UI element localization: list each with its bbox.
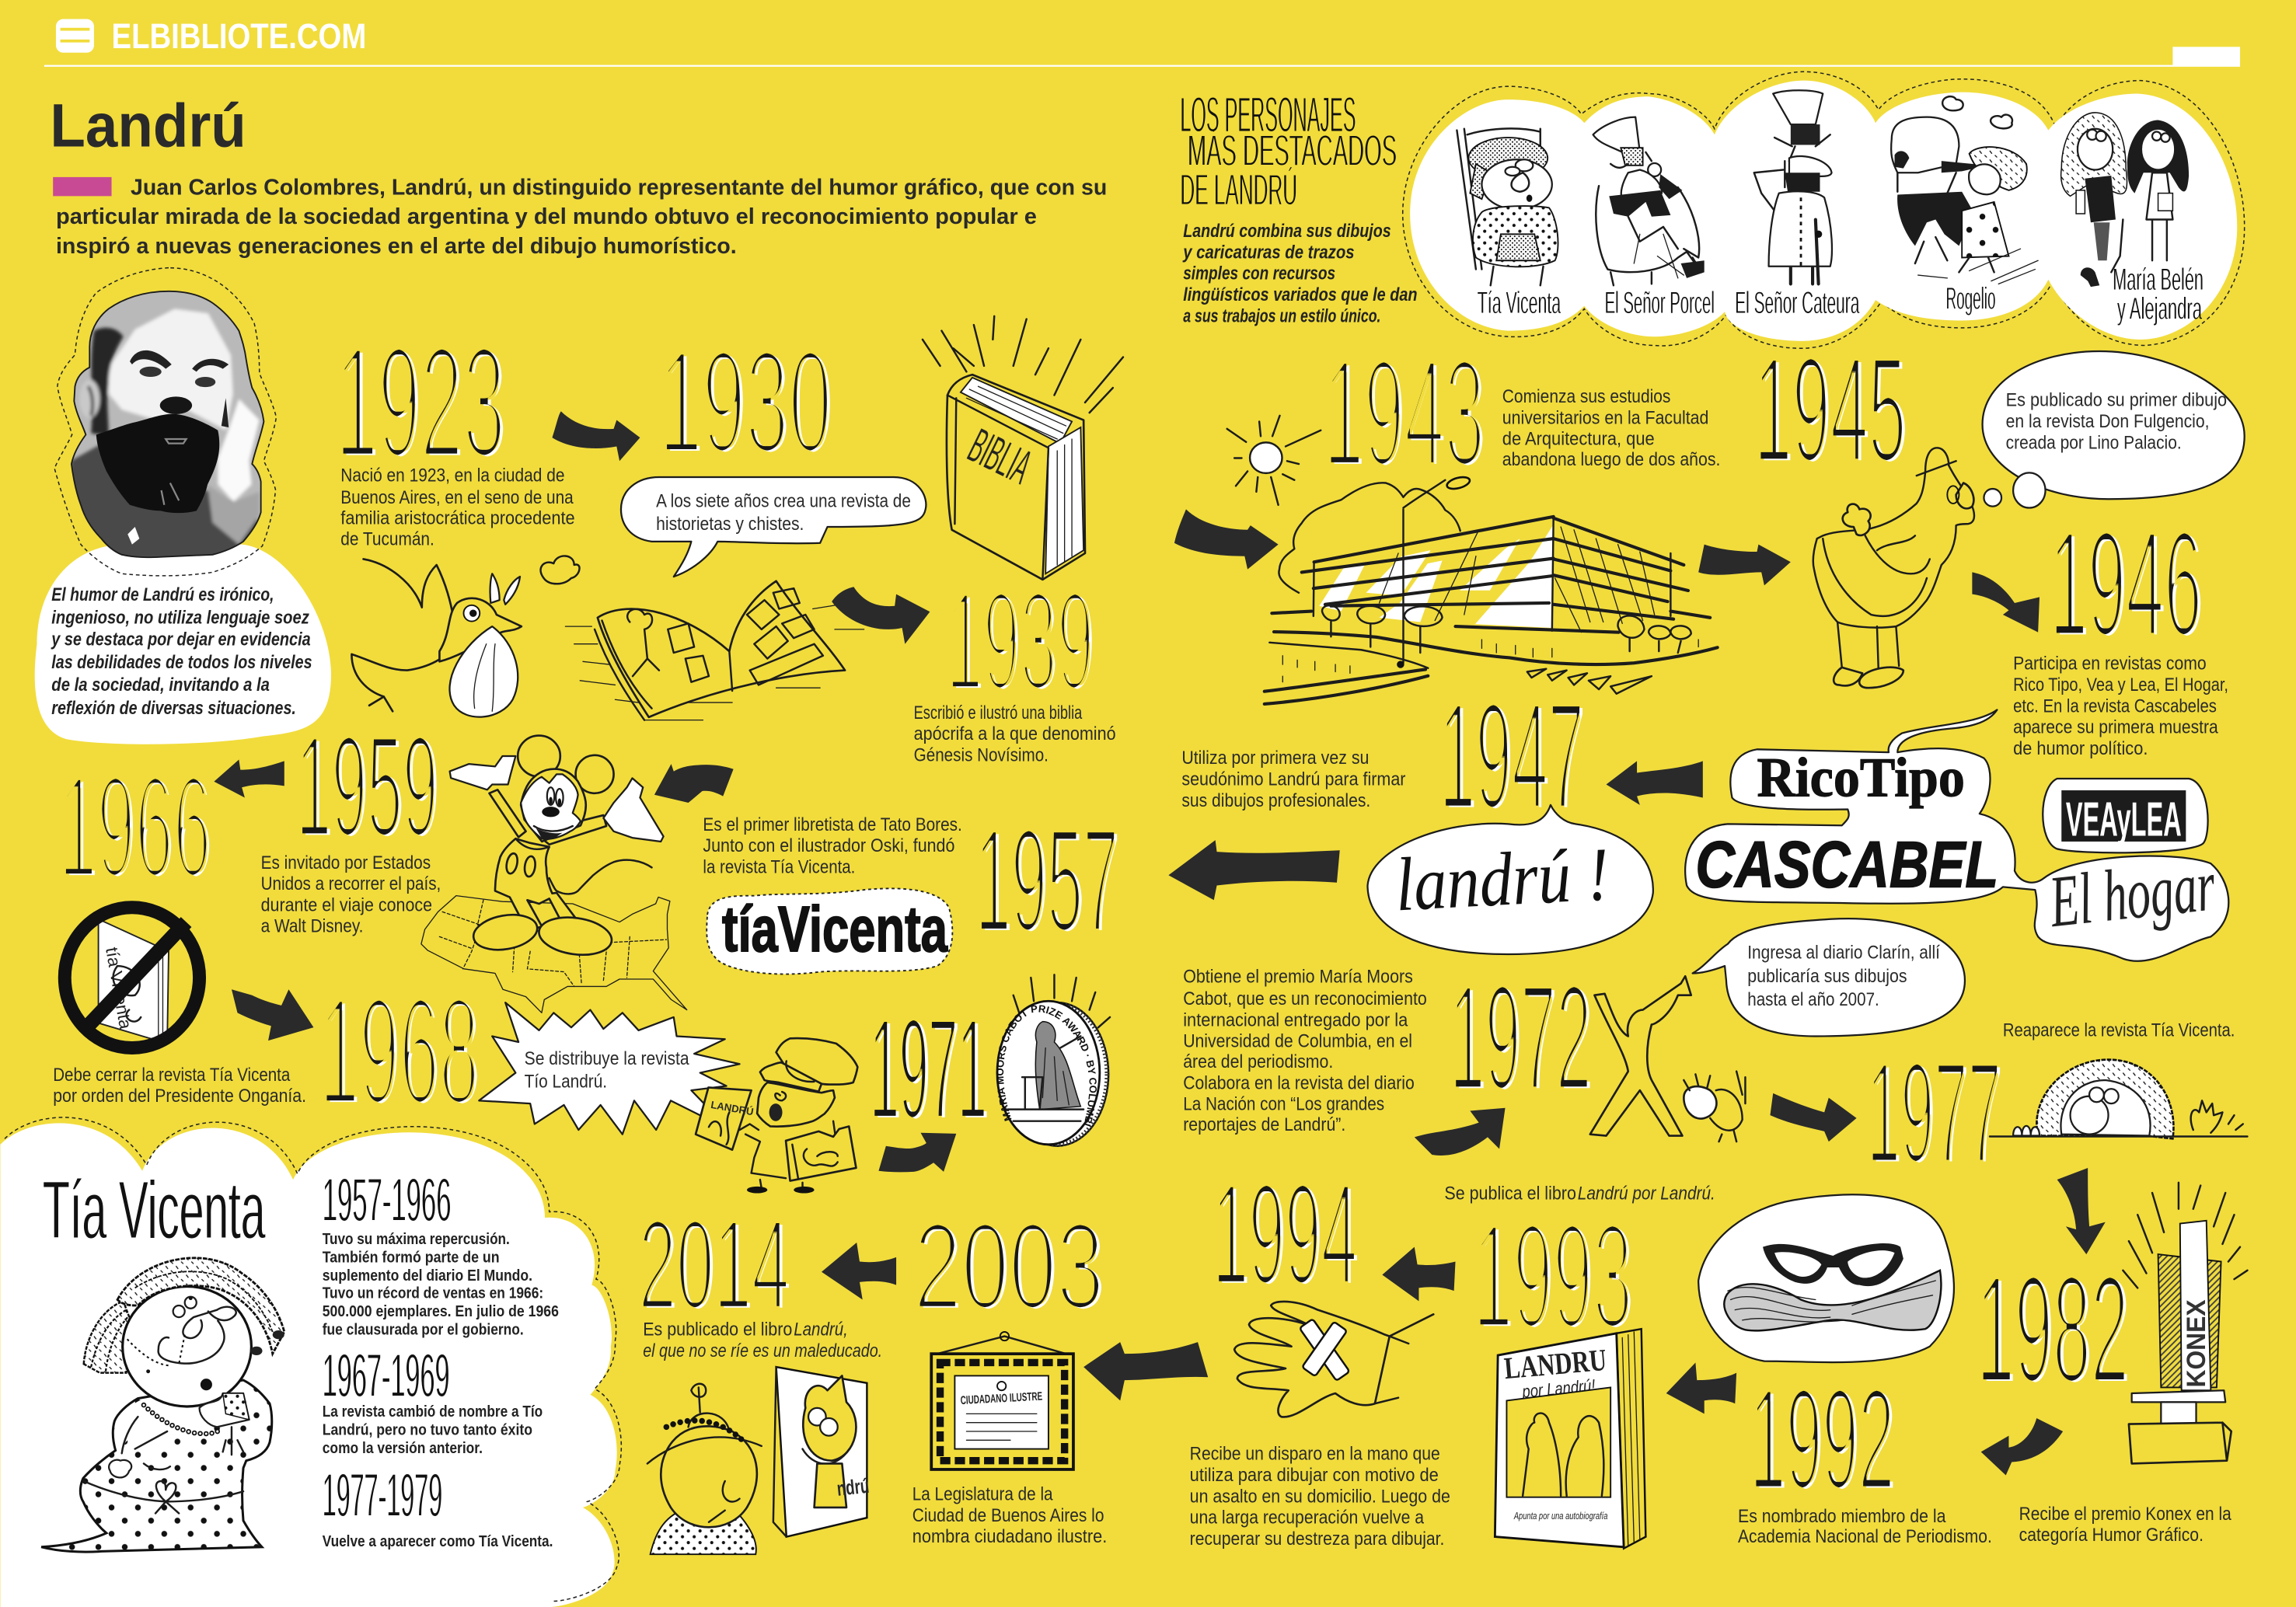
arrow: 1993 to 1994 bbox=[1382, 1247, 1456, 1301]
text: period 1967-1969: como la versión anterior. bbox=[323, 1439, 483, 1457]
icon: glasses on newspapers bbox=[1698, 1194, 1954, 1362]
text: book 2014: Es publicado el libro bbox=[643, 1319, 792, 1340]
text: characters description: lingüísticos variados que le dan bbox=[1183, 284, 1418, 305]
text: closure of magazine bbox=[53, 1065, 306, 1107]
text: Walt Disney 1959: a Walt Disney. bbox=[261, 916, 363, 937]
infographic canvas: 1972 bbox=[1450, 953, 1592, 1121]
text: period 1967-1969: Landrú, pero no tuvo tanto éxito bbox=[323, 1421, 532, 1439]
character names: Tía Vicenta bbox=[1478, 286, 1561, 320]
thought bubble: first drawing: Es publicado su primer dibujo bbox=[2006, 390, 2227, 411]
year 1930: 1930 bbox=[659, 320, 832, 483]
thought bubble: first drawing bbox=[1983, 351, 2245, 508]
heading: characters bbox=[1180, 87, 1397, 214]
text: hand injury 1994: una larga recuperación vuelve a bbox=[1190, 1508, 1424, 1529]
icon: book Landrú por Landrú bbox=[1495, 1329, 1645, 1549]
speech bubble: Landrú signature: landrú ! bbox=[1394, 832, 1611, 927]
logo: Vea y Lea: VEAyLEA bbox=[2066, 793, 2182, 846]
text: Tato Bores 1957 bbox=[703, 814, 962, 877]
arrow: 1992 to 1993 bbox=[1666, 1362, 1736, 1414]
infographic canvas: LOS PERSONAJES bbox=[1180, 87, 1356, 143]
text: academy 1992 bbox=[1738, 1506, 1992, 1547]
text: Konex award: categoría Humor Gráfico. bbox=[2019, 1525, 2204, 1546]
text: period 1957-1966: suplemento del diario El Mundo. bbox=[323, 1267, 532, 1285]
logo: Tía Vicenta magazine bbox=[707, 888, 952, 974]
thought bubble: first drawing: creada por Lino Palacio. bbox=[2006, 432, 2182, 453]
header bar bbox=[44, 16, 2240, 67]
text: book 2014: el que no se ríe es un maleducado. bbox=[643, 1340, 882, 1361]
text: magazines 1946: Rico Tipo, Vea y Lea, El Hogar, bbox=[2013, 675, 2228, 695]
text: Walt Disney 1959 bbox=[261, 852, 441, 937]
panel: humor quote bubble: y se destaca por dejar en evidencia bbox=[51, 629, 311, 650]
text: hand injury 1994: Recibe un disparo en la mano que bbox=[1190, 1444, 1440, 1465]
text: Cabot prize 1972: Obtiene el premio María Moors bbox=[1183, 967, 1413, 988]
text: closure of magazine: Debe cerrar la revista Tía Vicenta bbox=[53, 1065, 291, 1086]
text: Konex award: Recibe el premio Konex en la bbox=[2019, 1504, 2231, 1525]
icon: figure with trumpet bbox=[1590, 976, 1745, 1142]
logo: Cascabel: CASCABEL bbox=[1695, 827, 1998, 901]
icon: Tía Vicenta full figure bbox=[41, 1258, 284, 1552]
text: university 1943: Comienza sus estudios bbox=[1502, 386, 1670, 407]
infographic canvas: 1968 bbox=[319, 966, 479, 1136]
character names: El Señor Porcel bbox=[1605, 286, 1715, 320]
panel: Tía Vicenta sidebar: 1967-1969 bbox=[323, 1340, 450, 1410]
arrow: to 1945 bbox=[1698, 545, 1791, 585]
text: birth 1923: familia aristocrática procedente bbox=[340, 507, 575, 528]
text: Walt Disney 1959: durante el viaje conoce bbox=[261, 894, 432, 915]
text: period 1957-1966: 500.000 ejemplares. En julio de 1966 bbox=[323, 1302, 559, 1320]
icon: banned magazine bbox=[65, 908, 200, 1048]
text: period 1957-1966: fue clausurada por el gobierno. bbox=[323, 1321, 524, 1339]
text: pseudonym 1947: Utiliza por primera vez su bbox=[1181, 748, 1369, 769]
infographic canvas: 1943 bbox=[1324, 328, 1485, 498]
starburst callout: Tío Landrú: Tío Landrú. bbox=[525, 1071, 607, 1092]
text: magazines 1946 bbox=[2013, 654, 2228, 759]
text: period 1967-1969: La revista cambió de nombre a Tío bbox=[323, 1403, 543, 1421]
icon: site logo bbox=[56, 19, 94, 53]
text: period 1957-1966 bbox=[323, 1230, 559, 1339]
text: book 1993: Se publica el libro bbox=[1444, 1183, 1576, 1204]
text: book 1993: Landrú por Landrú. bbox=[1578, 1183, 1715, 1204]
panel: humor quote bubble: reflexión de diversas situaciones. bbox=[51, 698, 296, 719]
text: magazines 1946: de humor político. bbox=[2013, 738, 2148, 759]
text: pseudonym 1947: seudónimo Landrú para firmar bbox=[1181, 769, 1405, 790]
arrow: 2003 to 2014 bbox=[822, 1243, 896, 1299]
arrow: to 1977 bbox=[1770, 1093, 1857, 1142]
panel: characters cloud bbox=[1403, 71, 2245, 348]
infographic canvas: 1923 bbox=[336, 315, 505, 491]
text: period 1977-1979: Vuelve a aparecer como Tía Vicenta. bbox=[323, 1532, 553, 1550]
icon: bird with bag bbox=[351, 556, 580, 717]
panel: Tía Vicenta sidebar: 1977-1979 bbox=[323, 1460, 442, 1529]
infographic canvas: 1959 bbox=[296, 706, 438, 866]
text: birth 1923: Nació en 1923, en la ciudad de bbox=[340, 465, 564, 486]
text: period 1957-1966: Tuvo un récord de ventas en 1966: bbox=[323, 1285, 543, 1302]
logo: Tía Vicenta magazine: tíaVicenta bbox=[722, 893, 948, 965]
text: Walt Disney 1959: Es invitado por Estados bbox=[261, 852, 431, 873]
text: characters description: simples con recursos bbox=[1183, 263, 1335, 284]
starburst callout: Tío Landrú: Se distribuye la revista bbox=[525, 1048, 689, 1069]
icon: architecture faculty building bbox=[1265, 475, 1718, 704]
text: birth 1923 bbox=[340, 465, 575, 550]
character names: Rogelio bbox=[1945, 281, 1996, 315]
text: birth 1923: Buenos Aires, en el seno de una bbox=[340, 487, 574, 508]
arrow: big left bbox=[1168, 840, 1340, 900]
infographic canvas: 1994 bbox=[1213, 1155, 1357, 1315]
logos: magazine bubbles bbox=[1685, 709, 2228, 961]
character: El Señor Cateura bbox=[1754, 90, 1832, 284]
text: hand injury 1994 bbox=[1190, 1444, 1450, 1549]
speech bubble: magazine at seven: historietas y chistes. bbox=[656, 514, 804, 535]
year 2014: 2014 bbox=[639, 1194, 790, 1336]
text: Cabot prize 1972: reportajes de Landrú”. bbox=[1183, 1114, 1345, 1135]
icon: sun bbox=[1227, 416, 1321, 505]
text: period 1967-1969 bbox=[323, 1403, 543, 1457]
arrow: to 2003 bbox=[1083, 1342, 1208, 1400]
speech bubble: magazine at seven: A los siete años crea una revista de bbox=[656, 491, 911, 512]
arrow: 1982 to 1992 bbox=[1981, 1418, 2063, 1475]
text: pseudonym 1947: sus dibujos profesionales. bbox=[1181, 790, 1370, 811]
infographic canvas: 1993 bbox=[1473, 1192, 1632, 1359]
text: illustrious citizen 2003 bbox=[912, 1484, 1107, 1547]
text: illustrious citizen 2003: nombra ciudadano ilustre. bbox=[912, 1526, 1107, 1547]
text: period 1957-1966: Tuvo su máxima repercusión. bbox=[323, 1230, 510, 1248]
infographic canvas: 1945 bbox=[1754, 326, 1907, 493]
text: characters description: Landrú combina sus dibujos bbox=[1183, 221, 1391, 242]
text: Tato Bores 1957: la revista Tía Vicenta. bbox=[703, 856, 855, 877]
year 2003: 2003 bbox=[914, 1197, 1104, 1335]
intro paragraph: Juan Carlos Colombres, Landrú, un distinguido representante del humor gráfico, que con su bbox=[131, 174, 1107, 199]
text: university 1943: de Arquitectura, que bbox=[1502, 429, 1655, 450]
icon: framed illustrious citizen diploma: CIUDADANO ILUSTRE bbox=[960, 1390, 1043, 1407]
character: Rogelio bbox=[1891, 96, 2038, 284]
text: bible 1939: apócrifa a la que denominó bbox=[914, 723, 1116, 744]
text: Konex award bbox=[2019, 1504, 2231, 1546]
character: María Belén and Alejandra bbox=[2061, 113, 2189, 287]
portrait photo of Landrú bbox=[54, 268, 276, 576]
speech bubble: Landrú signature bbox=[1368, 805, 1653, 954]
icon: boy with magazines: LANDRÚ bbox=[710, 1099, 755, 1117]
arrow: to 1946 bbox=[1972, 572, 2040, 633]
infographic canvas: 1992 bbox=[1750, 1359, 1895, 1519]
text: Cabot prize 1972: Universidad de Columbia, en el bbox=[1183, 1031, 1412, 1052]
speech bubble: Clarín: publicaría sus dibujos bbox=[1747, 966, 1907, 987]
arrow: to 1972 bbox=[1415, 1108, 1506, 1156]
panel: Tía Vicenta sidebar bbox=[0, 1117, 621, 1607]
panel: humor quote bubble bbox=[35, 545, 331, 744]
icon: book Landrú por Landrú: LANDRU bbox=[1503, 1343, 1608, 1386]
icon: boy with magazines bbox=[696, 1038, 857, 1194]
speech bubble: magazine at seven bbox=[621, 477, 926, 577]
text: reappears: Reaparece la revista Tía Vicenta. bbox=[2003, 1020, 2235, 1041]
icon: book with cat bbox=[773, 1367, 871, 1537]
icon: María Moors Cabot medal bbox=[996, 974, 1111, 1147]
arrow: 1923 to 1930 bbox=[552, 411, 640, 461]
site name: ELBIBLIOTE.COM bbox=[112, 16, 366, 56]
panel: humor quote bubble: ingenioso, no utiliza lenguaje soez bbox=[51, 607, 309, 628]
infographic canvas: 1957 bbox=[975, 799, 1118, 962]
intro paragraph bbox=[53, 174, 1107, 258]
infographic canvas: 1971 bbox=[870, 989, 987, 1149]
icon: bible book: BIBLIA bbox=[960, 419, 1040, 495]
arrow: to 1966 bbox=[214, 759, 284, 797]
text: magazines 1946: aparece su primera muestra bbox=[2013, 717, 2218, 738]
character names bbox=[1478, 263, 2204, 326]
icon: man with hat bbox=[1813, 448, 1974, 688]
heading: characters: MÁS DESTACADOS bbox=[1188, 126, 1397, 175]
text: book 2014 bbox=[643, 1319, 882, 1361]
icon: book with cat: ndrú bbox=[836, 1474, 871, 1501]
text: Walt Disney 1959: Unidos a recorrer el país, bbox=[261, 873, 441, 894]
infographic canvas: 1947 bbox=[1439, 672, 1584, 841]
panel: humor quote bubble: El humor de Landrú es irónico, bbox=[51, 584, 274, 605]
text: illustrious citizen 2003: La Legislatura de la bbox=[912, 1484, 1053, 1505]
text: Cabot prize 1972: Cabot, que es un reconocimiento bbox=[1183, 988, 1427, 1009]
text: characters description bbox=[1182, 221, 1418, 326]
arrow: into 1943 bbox=[1174, 509, 1279, 570]
character names: y Alejandra bbox=[2117, 292, 2202, 326]
intro paragraph: particular mirada de la sociedad argentina y del mundo obtuvo el reconocimiento popular e bbox=[56, 204, 1037, 228]
arrow: to 1971 bbox=[878, 1133, 956, 1172]
icon: bible book bbox=[923, 316, 1123, 580]
icon: Mickey Mouse bbox=[450, 736, 664, 959]
text: Cabot prize 1972: La Nación con “Los grandes bbox=[1183, 1094, 1384, 1115]
text: academy 1992: Es nombrado miembro de la bbox=[1738, 1506, 1946, 1527]
speech bubble: Clarín: Ingresa al diario Clarín, allí bbox=[1747, 943, 1940, 964]
text: bible 1939 bbox=[914, 702, 1116, 765]
text: Cabot prize 1972: área del periodismo. bbox=[1183, 1051, 1333, 1072]
logo: Rico Tipo: RicoTipo bbox=[1757, 748, 1965, 809]
infographic canvas: 1939 bbox=[946, 563, 1094, 720]
text: characters description: y caricaturas de trazos bbox=[1182, 242, 1355, 263]
character names: María Belén bbox=[2113, 263, 2204, 297]
character: El Señor Porcel bbox=[1593, 117, 1705, 285]
text: magazines 1946: Participa en revistas como bbox=[2013, 654, 2207, 675]
text: Tato Bores 1957: Junto con el ilustrador Oski, fundó bbox=[703, 835, 954, 856]
icon: book Landrú por Landrú: por Landrú! bbox=[1521, 1375, 1596, 1402]
panel: humor quote bubble: las debilidades de todos los niveles bbox=[51, 652, 312, 673]
text: magazines 1946: etc. En la revista Cascabeles bbox=[2013, 695, 2217, 716]
speech bubble: Clarín: hasta el año 2007. bbox=[1747, 989, 1879, 1010]
icon: Tía Vicenta peeking bbox=[1990, 1060, 2247, 1138]
text: Cabot prize 1972: Colabora en la revista del diario bbox=[1183, 1072, 1415, 1093]
intro paragraph: inspiró a nuevas generaciones en el arte del dibujo humorístico. bbox=[56, 233, 737, 258]
icon: María Moors Cabot medal: MARIA MOORS CABOT PRIZE AWARD · BY COLUMBIA UNIVERSITY bbox=[996, 1005, 1097, 1127]
arrow: to 1947 bbox=[1607, 761, 1703, 805]
icon: Konex trophy: KONEX bbox=[2182, 1299, 2211, 1387]
title: Landrú bbox=[50, 90, 246, 159]
text: bible 1939: Génesis Novísimo. bbox=[914, 744, 1049, 765]
heading: characters: DE LANDRÚ bbox=[1180, 166, 1297, 214]
thought bubble: first drawing: en la revista Don Fulgencio, bbox=[2006, 411, 2209, 432]
character names: El Señor Cateura bbox=[1735, 286, 1859, 320]
text: closure of magazine: por orden del Presidente Onganía. bbox=[53, 1086, 306, 1107]
text: hand injury 1994: un asalto en su domicilio. Luego de bbox=[1190, 1486, 1450, 1507]
heading: Tía Vicenta: Tía Vicenta bbox=[43, 1165, 265, 1256]
starburst callout: Tío Landrú bbox=[479, 1002, 740, 1135]
infographic canvas: 1977 bbox=[1867, 1033, 2001, 1193]
arrow: to 1968 bbox=[232, 989, 313, 1041]
arrow: to 1939 bbox=[832, 587, 930, 644]
speech bubble: Clarín bbox=[1693, 919, 1965, 1036]
text: characters description: a sus trabajos un estilo único. bbox=[1183, 305, 1380, 326]
character: Tía Vicenta seated bbox=[1457, 128, 1558, 285]
infographic canvas: 1966 bbox=[59, 745, 211, 908]
text: hand injury 1994: recuperar su destreza para dibujar. bbox=[1190, 1529, 1444, 1549]
text: birth 1923: de Tucumán. bbox=[340, 529, 434, 550]
icon: framed illustrious citizen diploma bbox=[931, 1332, 1073, 1469]
icon: open comic book bbox=[565, 581, 864, 720]
text: book 1993 bbox=[1444, 1183, 1715, 1204]
text: pseudonym 1947 bbox=[1181, 748, 1405, 811]
icon: Konex trophy bbox=[2123, 1183, 2247, 1463]
text: university 1943 bbox=[1502, 386, 1720, 470]
panel: Tía Vicenta sidebar: 1957-1966 bbox=[323, 1165, 451, 1234]
icon: USA map bbox=[421, 896, 687, 1013]
icon: bandaged hand bbox=[1234, 1302, 1433, 1417]
arrow: 1977 to 1982 bbox=[2057, 1168, 2106, 1254]
text: Tato Bores 1957: Es el primer libretista de Tato Bores. bbox=[703, 814, 962, 835]
text: academy 1992: Academia Nacional de Periodismo. bbox=[1738, 1526, 1992, 1547]
text: Cabot prize 1972: internacional entregado por la bbox=[1183, 1009, 1408, 1030]
text: book 2014: Landrú, bbox=[794, 1319, 848, 1340]
text: hand injury 1994: utiliza para dibujar con motivo de bbox=[1190, 1465, 1439, 1486]
text: bible 1939: Escribió e ilustró una biblia bbox=[914, 702, 1083, 723]
icon: banned magazine: tía Vicenta bbox=[102, 946, 135, 1030]
text: university 1943: abandona luego de dos años. bbox=[1502, 449, 1720, 470]
text: university 1943: universitarios en la Facultad bbox=[1502, 407, 1708, 428]
icon: book Landrú por Landrú: Apunta por una autobiografía bbox=[1513, 1510, 1607, 1522]
panel: humor quote bubble: de la sociedad, invitando a la bbox=[51, 675, 270, 695]
text: illustrious citizen 2003: Ciudad de Buenos Aires lo bbox=[912, 1505, 1104, 1526]
icon: lady with hat bbox=[647, 1384, 762, 1554]
text: period 1957-1966: También formó parte de un bbox=[323, 1248, 500, 1266]
text: Cabot prize 1972 bbox=[1183, 967, 1427, 1135]
arrow: to Mickey bbox=[654, 764, 734, 803]
